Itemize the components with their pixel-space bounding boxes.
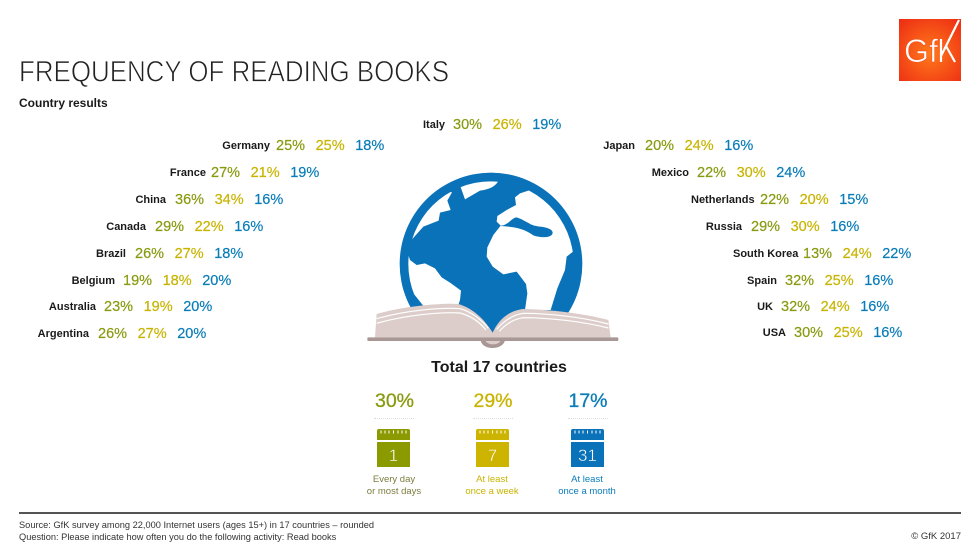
row: Netherlands: 20% xyxy=(800,192,829,208)
row: China: 34% xyxy=(215,192,244,208)
row: China: 36% xyxy=(175,192,204,208)
icon: calendar 31 xyxy=(571,429,604,467)
row: Japan: 24% xyxy=(685,138,714,154)
row: Mexico: 22% xyxy=(697,165,726,181)
stat: 17%: 17% xyxy=(568,390,608,412)
logo: GfK: Gf xyxy=(904,33,938,69)
row: South Korea: 24% xyxy=(843,246,872,262)
row: USA: USA xyxy=(763,327,786,339)
row: Spain: Spain xyxy=(747,275,777,287)
row: Brazil: Brazil xyxy=(96,248,126,260)
row: UK xyxy=(757,299,889,315)
icon: globe on open book xyxy=(367,172,618,348)
row: Italy: 30% xyxy=(453,117,482,133)
row: USA: 25% xyxy=(834,325,863,341)
row: USA: 30% xyxy=(794,325,823,341)
row: Canada: 29% xyxy=(155,219,184,235)
row: UK: 24% xyxy=(821,299,850,315)
row: Mexico: 24% xyxy=(776,165,805,181)
row: South Korea: South Korea xyxy=(733,248,798,260)
row: Italy xyxy=(423,117,561,133)
row: Argentina: 20% xyxy=(177,326,206,342)
row: USA xyxy=(763,325,902,341)
row: Germany: 25% xyxy=(316,138,345,154)
row: Spain: 25% xyxy=(825,273,854,289)
row: Canada: 16% xyxy=(234,219,263,235)
label: once a week: At least xyxy=(476,474,508,485)
icon: calendar 1: 1 xyxy=(389,446,398,465)
row: Mexico: Mexico xyxy=(652,167,689,179)
footer rule xyxy=(19,512,961,514)
row: France: France xyxy=(170,167,206,179)
row: Germany: 25% xyxy=(276,138,305,154)
label: once a week: once a week xyxy=(465,486,519,497)
stat: 30%: 30% xyxy=(375,390,414,412)
row: Italy: 26% xyxy=(493,117,522,133)
source note xyxy=(19,520,374,542)
row: UK: 32% xyxy=(781,299,810,315)
row: Japan: 20% xyxy=(645,138,674,154)
row: Argentina xyxy=(38,326,206,342)
book xyxy=(367,304,618,348)
icon: calendar 31: 31 xyxy=(578,446,597,465)
row: Argentina: 27% xyxy=(138,326,167,342)
icon: calendar 1 xyxy=(377,429,410,467)
row: Australia: Australia xyxy=(49,301,96,313)
row: France: 27% xyxy=(211,165,240,181)
row: Netherlands: 22% xyxy=(760,192,789,208)
row: Russia: 30% xyxy=(791,219,820,235)
row: Mexico xyxy=(652,165,805,181)
row: Mexico: 30% xyxy=(737,165,766,181)
row: USA: 16% xyxy=(873,325,902,341)
row: Japan: Japan xyxy=(603,140,635,152)
label: once a month: once a month xyxy=(558,486,616,497)
row: Russia: 29% xyxy=(751,219,780,235)
row: UK: 16% xyxy=(860,299,889,315)
source note: Question: Please indicate how often you do the following activity: Read books xyxy=(19,532,336,542)
row: Japan xyxy=(603,138,753,154)
row: Canada xyxy=(106,219,263,235)
row: Netherlands xyxy=(691,192,868,208)
row: France xyxy=(170,165,319,181)
globe xyxy=(400,172,582,333)
row: Italy: 19% xyxy=(532,117,561,133)
row: Germany xyxy=(222,138,384,154)
row: Canada: 22% xyxy=(195,219,224,235)
row: China: China xyxy=(135,194,166,206)
row: Brazil xyxy=(96,246,243,262)
row: Australia: 19% xyxy=(144,299,173,315)
row: Russia: Russia xyxy=(706,221,742,233)
row: Russia: 16% xyxy=(830,219,859,235)
source note: Source: GfK survey among 22,000 Internet users (ages 15+) in 17 countries – rounded xyxy=(19,520,374,530)
row: Australia: 23% xyxy=(104,299,133,315)
row: South Korea: 13% xyxy=(803,246,832,262)
row: China: 16% xyxy=(254,192,283,208)
label: every day: or most days xyxy=(367,486,421,497)
label: once a month xyxy=(558,474,616,497)
logo: GfK xyxy=(899,19,961,81)
row: Netherlands: 15% xyxy=(839,192,868,208)
icon: calendar 7 xyxy=(476,429,509,467)
row: Canada: Canada xyxy=(106,221,146,233)
row: Spain: 32% xyxy=(785,273,814,289)
row: Germany: Germany xyxy=(222,140,270,152)
row: Brazil: 26% xyxy=(135,246,164,262)
row: Belgium: 19% xyxy=(123,273,152,289)
heading: total 17 countries: Total 17 countries xyxy=(431,359,567,376)
row: UK: UK xyxy=(757,301,773,313)
row: Argentina: 26% xyxy=(98,326,127,342)
row: Belgium: 20% xyxy=(202,273,231,289)
row: Brazil: 27% xyxy=(175,246,204,262)
label: once a month: At least xyxy=(571,474,603,485)
row: Japan: 16% xyxy=(724,138,753,154)
row: Germany: 18% xyxy=(355,138,384,154)
row: Australia: 20% xyxy=(183,299,212,315)
row: Belgium: Belgium xyxy=(72,275,115,287)
row: Belgium: 18% xyxy=(163,273,192,289)
icon: calendar 7: 7 xyxy=(488,446,497,465)
row: France: 19% xyxy=(290,165,319,181)
row: Spain xyxy=(747,273,893,289)
row: Belgium xyxy=(72,273,231,289)
row: Netherlands: Netherlands xyxy=(691,194,755,206)
row: South Korea xyxy=(733,246,911,262)
row: Brazil: 18% xyxy=(214,246,243,262)
row: Argentina: Argentina xyxy=(38,328,89,340)
subtitle: country results: Country results xyxy=(19,96,108,110)
label: every day: Every day xyxy=(373,474,415,485)
row: Russia xyxy=(706,219,859,235)
copyright: © GfK 2017 xyxy=(911,531,961,542)
row: Spain: 16% xyxy=(864,273,893,289)
row: Italy: Italy xyxy=(423,119,445,131)
row: Australia xyxy=(49,299,212,315)
stat: 29%: 29% xyxy=(473,390,513,412)
label: once a week xyxy=(465,474,519,497)
row: South Korea: 22% xyxy=(882,246,911,262)
label: every day xyxy=(367,474,421,497)
row: China xyxy=(135,192,283,208)
row: France: 21% xyxy=(251,165,280,181)
